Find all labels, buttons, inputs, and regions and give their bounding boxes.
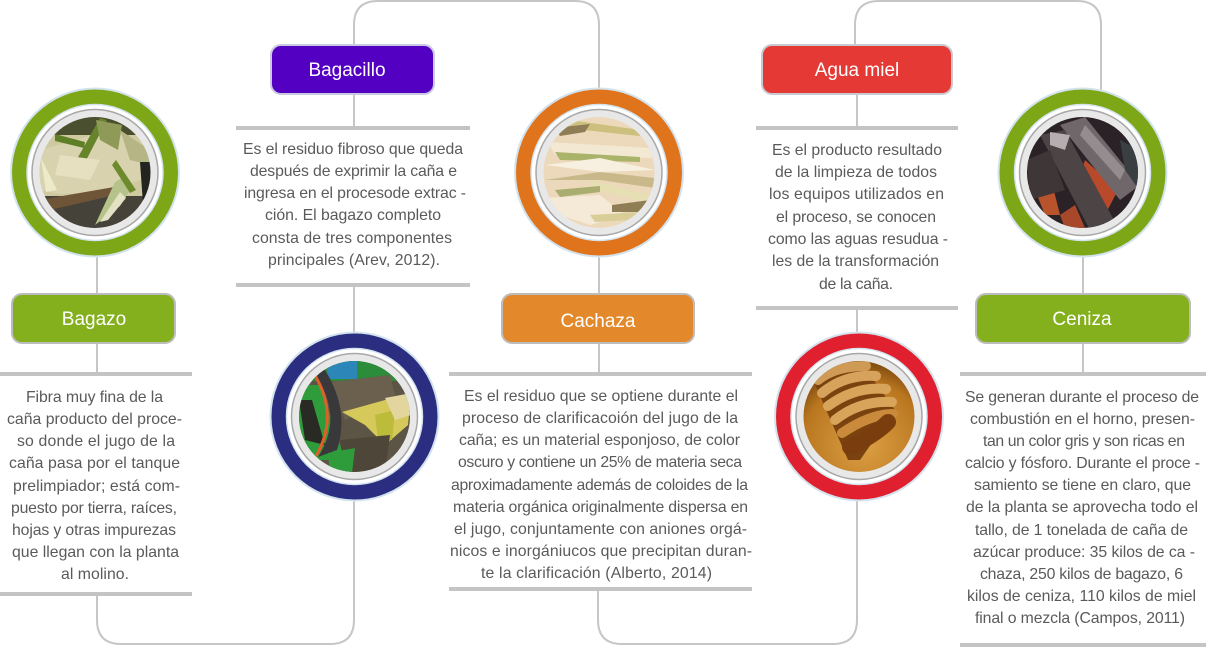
panel: Ceniza — [960, 88, 1206, 647]
button: Bagazo — [12, 294, 175, 343]
text: Bagazo description: hojas y otras impurezas — [12, 522, 176, 539]
text: Bagazo description: so donde el jugo de la — [17, 433, 175, 450]
text: Agua miel description: los equipos utilizados en — [769, 186, 944, 203]
text: Bagazo description: al molino. — [61, 566, 129, 583]
button: Cachaza: Cachaza — [560, 311, 636, 332]
text: Bagazo description: caña producto del proce- — [7, 411, 182, 428]
text: Ceniza description: kilos de ceniza, 110 kilos de miel — [967, 588, 1196, 605]
icon: bagazo photo circle — [11, 88, 179, 256]
button: Bagacillo: Bagacillo — [308, 60, 386, 81]
text: Ceniza description: combustión en el horno, presen- — [970, 411, 1195, 428]
text: Ceniza description: final o mezcla (Campos, 2011) — [975, 610, 1185, 627]
text: Ceniza description: tan un color gris y son ricas en — [983, 433, 1185, 450]
text: Ceniza description — [965, 389, 1200, 627]
text: Ceniza description: samiento se tiene en claro, que — [974, 477, 1191, 494]
text: Bagacillo description — [243, 141, 466, 269]
panel: Bagacillo — [236, 45, 470, 500]
button: Agua miel — [762, 45, 952, 94]
icon: cachaza photo circle — [515, 88, 683, 256]
text: Agua miel description: como las aguas resudua - — [768, 231, 948, 248]
text: Cachaza description: caña; es un material esponjoso, de color — [459, 432, 740, 449]
text: Ceniza description: tallo, de 1 tonelada de caña de — [975, 522, 1188, 539]
text: Cachaza description: aproximadamente además de coloides de la — [451, 477, 748, 494]
text: Cachaza description: te la clarificación (Alberto, 2014) — [481, 565, 712, 582]
text: Agua miel description — [768, 142, 948, 293]
button: Ceniza: Ceniza — [1052, 309, 1112, 330]
text: Bagacillo description: después de exprimir la caña e — [250, 163, 457, 180]
panel: Cachaza — [449, 88, 752, 591]
text: Ceniza description: azúcar produce: 35 kilos de ca - — [973, 544, 1195, 561]
button: Ceniza — [976, 294, 1190, 343]
text: Bagacillo description: Es el residuo fibroso que queda — [243, 141, 463, 158]
text: Cachaza description — [450, 388, 752, 582]
text: Ceniza description: chaza, 250 kilos de bagazo, 6 — [980, 566, 1183, 583]
text: Bagacillo description: consta de tres componentes — [252, 230, 452, 247]
text: Ceniza description: Se generan durante el proceso de — [965, 389, 1199, 406]
text: Bagazo description: que llegan con la planta — [12, 544, 179, 561]
text: Ceniza description: calcio y fósforo. Durante el proce - — [965, 455, 1200, 472]
text: Cachaza description: proceso de clarificacoión del jugo de la — [462, 410, 738, 427]
text: Cachaza description: Es el residuo que se optiene durante el — [464, 388, 738, 405]
icon: embers photo circle — [998, 88, 1166, 256]
text: Bagazo description: prelimpiador; está com- — [13, 478, 180, 495]
text: Ceniza description: de la planta se aprovecha todo el — [966, 499, 1198, 516]
text: Cachaza description: el jugo, conjuntamente con aniones orgá- — [454, 521, 747, 538]
button: Agua miel: Agua miel — [815, 60, 899, 81]
text: Bagacillo description: ción. El bagazo completo — [265, 207, 441, 224]
panel: Bagazo — [0, 88, 192, 596]
button: Bagazo: Bagazo — [62, 309, 126, 330]
text: Agua miel description: el proceso, se conocen — [776, 209, 936, 226]
text: Cachaza description: materia orgánica originalmente dispersa en — [453, 499, 748, 516]
button: Bagacillo — [271, 45, 434, 94]
text: Agua miel description: les de la transformación — [772, 253, 939, 270]
panel: Agua miel — [756, 45, 958, 500]
text: Bagazo description: puesto por tierra, raíces, — [11, 500, 177, 517]
text: Cachaza description: nicos e inorgániucos que precipitan duran- — [450, 543, 752, 560]
text: Bagazo description — [7, 389, 182, 583]
text: Bagacillo description: principales (Arev, 2012). — [268, 252, 440, 269]
text: Agua miel description: de la limpieza de todos — [775, 164, 937, 181]
text: Cachaza description: oscuro y contiene un 25% de materia seca — [458, 454, 742, 471]
text: Bagacillo description: ingresa en el procesode extrac - — [244, 185, 466, 202]
text: Agua miel description: Es el producto resultado — [772, 142, 942, 159]
text: Bagazo description: caña pasa por el tanque — [9, 455, 180, 472]
button: Cachaza — [502, 294, 694, 343]
text: Agua miel description: de la caña. — [819, 276, 893, 293]
icon: honey photo circle — [775, 332, 943, 500]
text: Bagazo description: Fibra muy fina de la — [26, 389, 163, 406]
icon: bagacillo photo circle — [270, 332, 438, 500]
